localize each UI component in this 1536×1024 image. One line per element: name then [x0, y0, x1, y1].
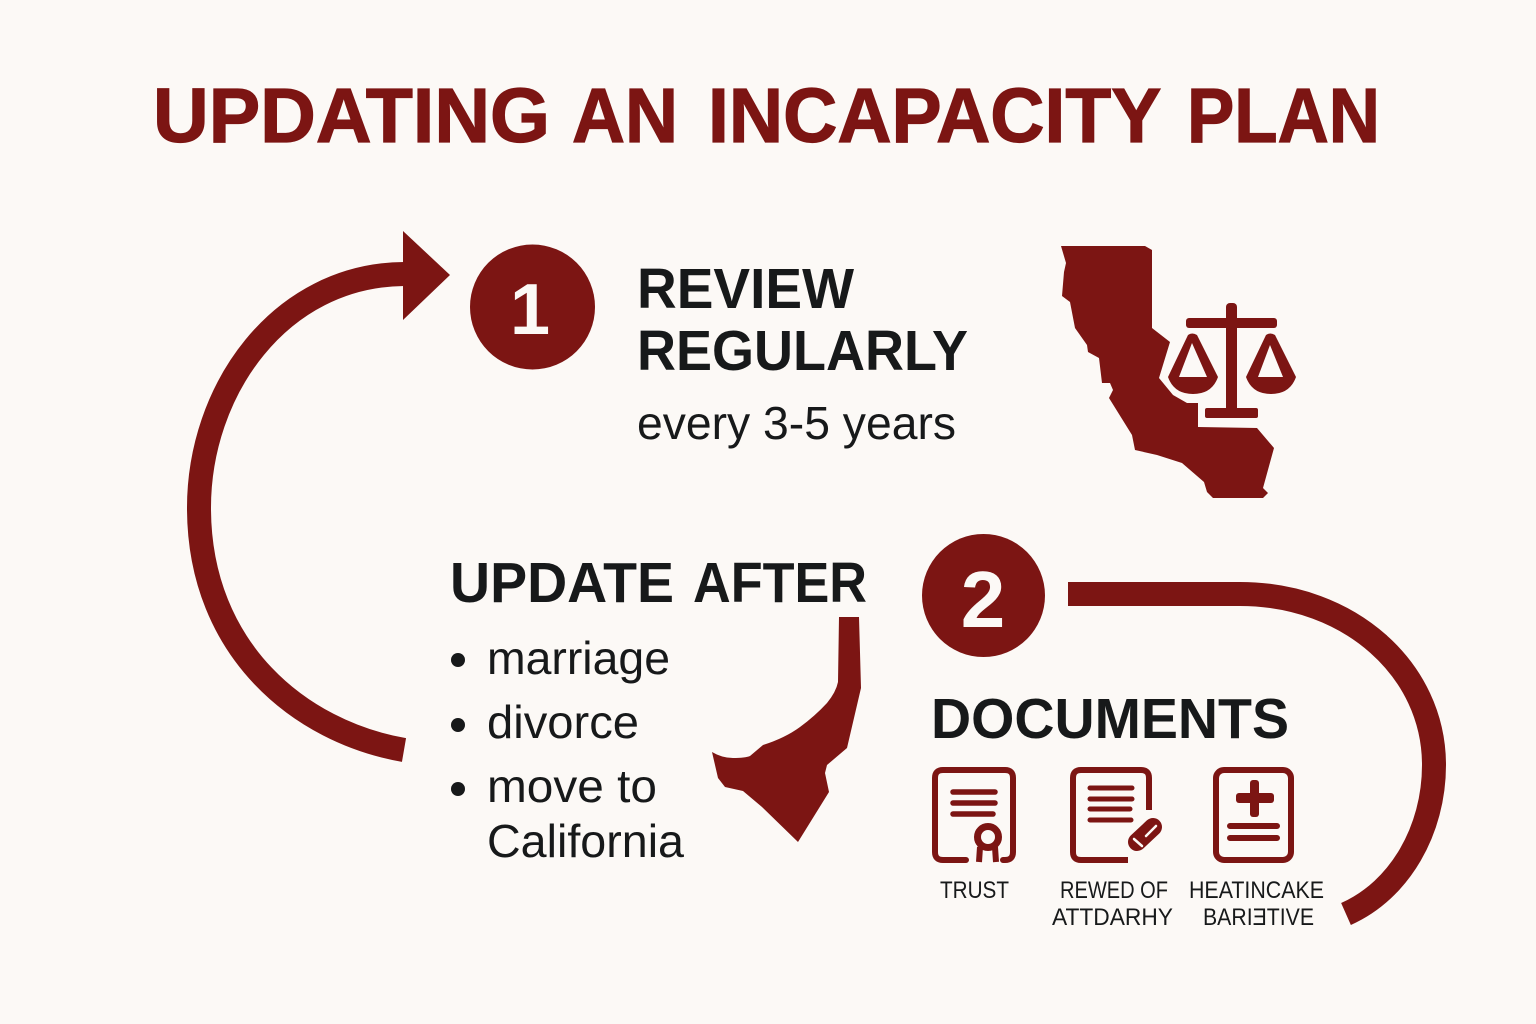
label: heatincake barigtive: HEATINCAKE	[1189, 877, 1324, 904]
update after list: move to	[487, 760, 657, 812]
step 1 heading: REVIEW	[637, 257, 854, 321]
title: UPDATING	[153, 73, 550, 159]
icon: California with scales of justice	[1061, 246, 1296, 498]
label: heatincake barigtive: BARIƎTIVE	[1203, 904, 1314, 931]
update after list: divorce	[487, 696, 639, 748]
icon: document with pen	[1073, 770, 1156, 860]
documents heading: DOCUMENTS	[931, 687, 1289, 751]
step 1 badge	[470, 244, 595, 370]
icon: health care document	[1216, 770, 1291, 860]
step 2 badge	[922, 534, 1045, 657]
label: rewed of attdarhy: ATTDARHY	[1052, 904, 1173, 931]
step 1 heading: REGULARLY	[637, 319, 968, 383]
icon: trust document	[935, 770, 1013, 862]
label: trust: TRUST	[940, 877, 1009, 904]
arrow: right curve from step 2	[1068, 594, 1434, 914]
step 2 badge: 2	[961, 555, 1005, 644]
step 1 badge: 1	[510, 270, 550, 350]
update after list	[451, 632, 684, 867]
icon: down-curving arrow shape	[712, 617, 861, 842]
update after list: California	[487, 815, 684, 867]
label: rewed of attdarhy: REWED OF	[1060, 877, 1168, 904]
step 1 subtext: every 3-5 years	[637, 397, 956, 449]
update after heading: AFTER	[693, 551, 867, 615]
update after list: marriage	[487, 632, 670, 684]
title: PLAN	[1187, 73, 1380, 159]
title: INCAPACITY	[708, 73, 1161, 159]
title: AN	[572, 73, 678, 159]
arrow: left cycle arrow to step 1	[199, 231, 450, 750]
update after heading: UPDATE	[450, 551, 674, 615]
